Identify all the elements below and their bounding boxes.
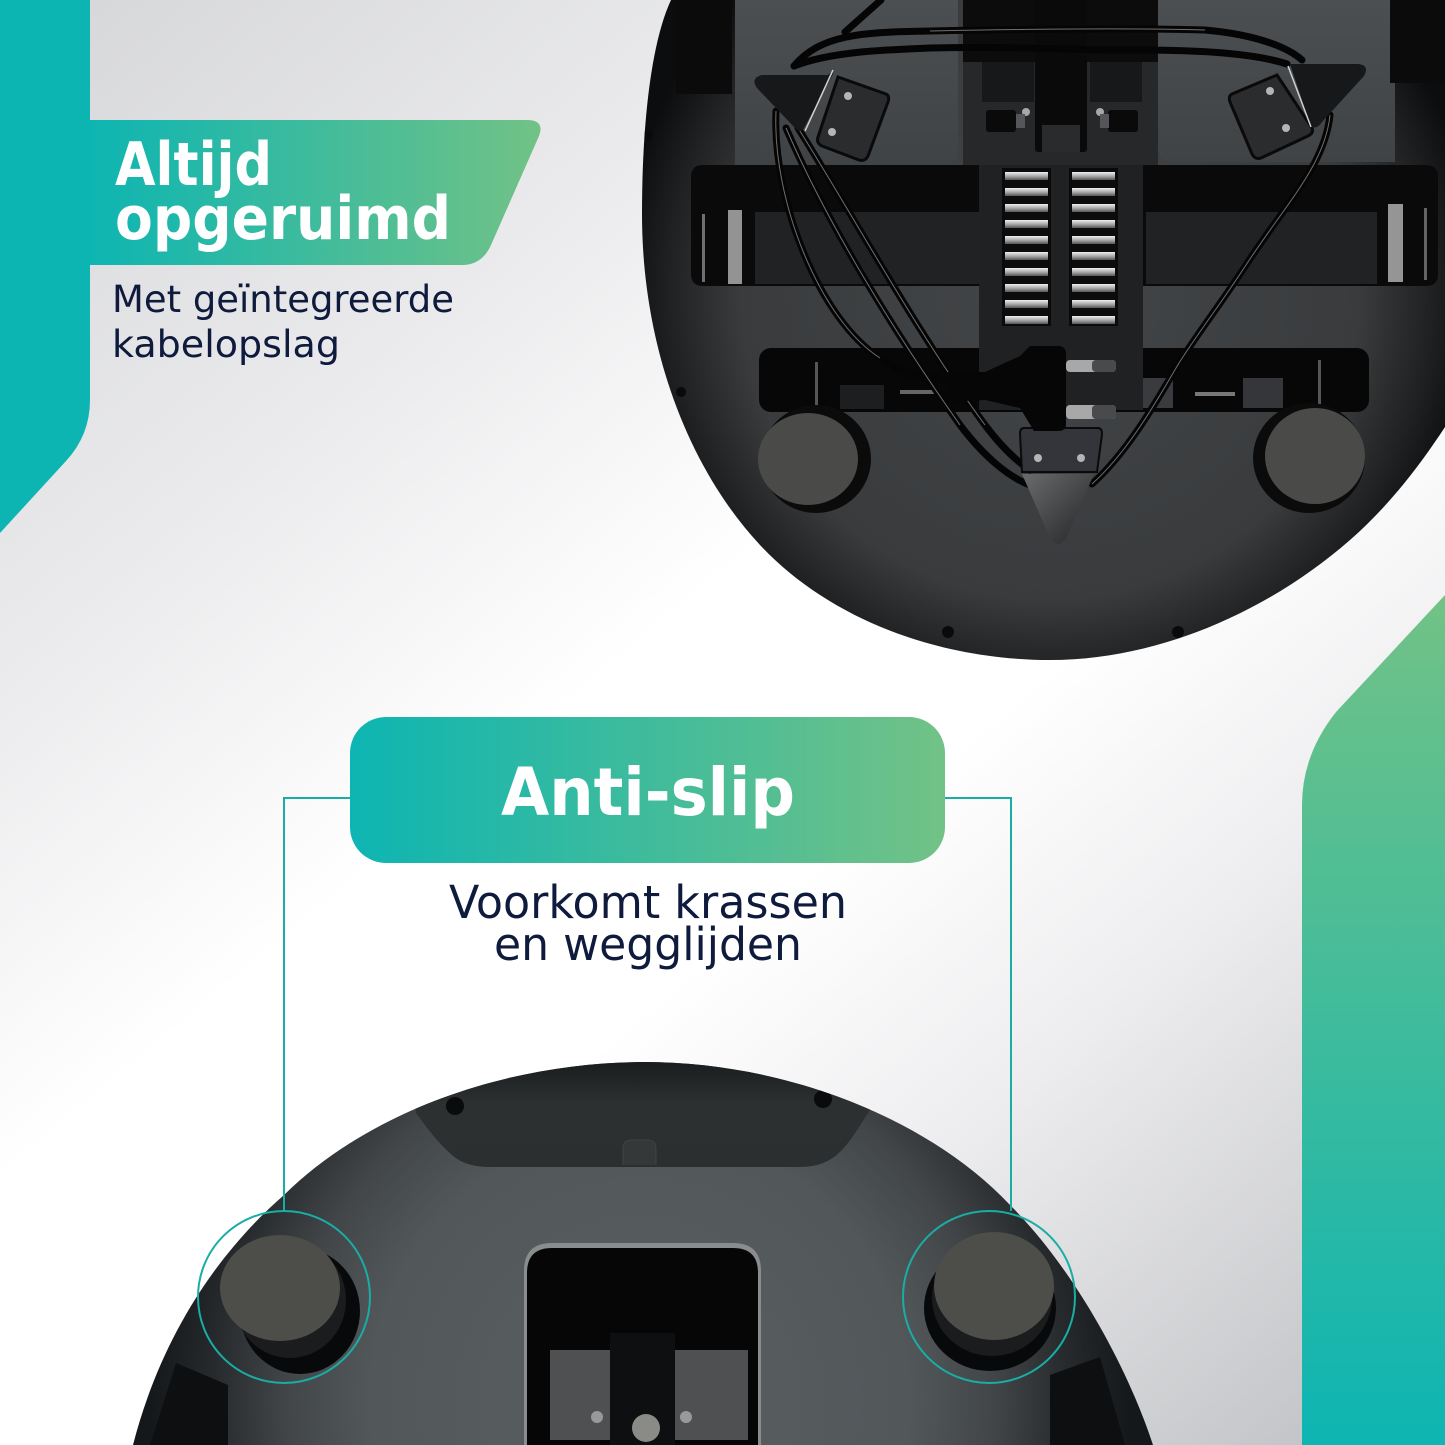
long horizontal slot: [691, 165, 1438, 286]
cable hook top left: [754, 70, 889, 160]
teal corner shape, top left: [0, 0, 90, 533]
rear compartment: [524, 1243, 761, 1445]
upper recess left: [684, 23, 732, 94]
lower slot: [759, 348, 1369, 412]
left felt foot: [220, 1235, 360, 1374]
screw holes: [643, 130, 1184, 638]
upper right panel: [1158, 0, 1395, 162]
centre column: [979, 165, 1143, 410]
corner recesses: [150, 1363, 228, 1445]
centre column top: [963, 0, 1158, 62]
cable: [776, 0, 1330, 486]
heading pill: Anti-slip: Anti-slip: [501, 754, 795, 831]
power plug: [946, 346, 1116, 431]
product photo: underside with cable storage: [640, 0, 1445, 662]
callout lines and circles: [198, 798, 1075, 1383]
heading pill: Anti-slip: [350, 717, 945, 863]
right felt foot: [1253, 403, 1365, 513]
product photo: bottom with anti-slip feet: [125, 1060, 1160, 1445]
cable hook bottom: [1020, 428, 1102, 544]
cable highlights: [776, 29, 1330, 484]
spring contacts: [1002, 168, 1118, 326]
text block: cable storage description: kabelopslag: [112, 323, 340, 366]
heading text: Altijd: [115, 130, 272, 200]
left felt foot: [758, 405, 871, 513]
upper left panel: [735, 0, 958, 165]
text block: anti-slip description: Voorkomt krassen: [449, 876, 847, 929]
text block: anti-slip description: en wegglijden: [494, 918, 802, 971]
right felt foot: [924, 1232, 1056, 1371]
green side shape, right: [1302, 595, 1445, 1445]
heading banner: Altijd opgeruimd: [90, 120, 540, 265]
lid: [410, 1060, 872, 1167]
robot body, lower: [125, 1060, 1160, 1445]
upper recess right: [1390, 0, 1410, 83]
robot body: [640, 0, 1445, 662]
text block: cable storage description: Met geïntegreerde: [112, 278, 454, 321]
rollers: [986, 108, 1138, 132]
cable hook top right: [1229, 64, 1366, 158]
heading text: opgeruimd: [115, 184, 451, 254]
